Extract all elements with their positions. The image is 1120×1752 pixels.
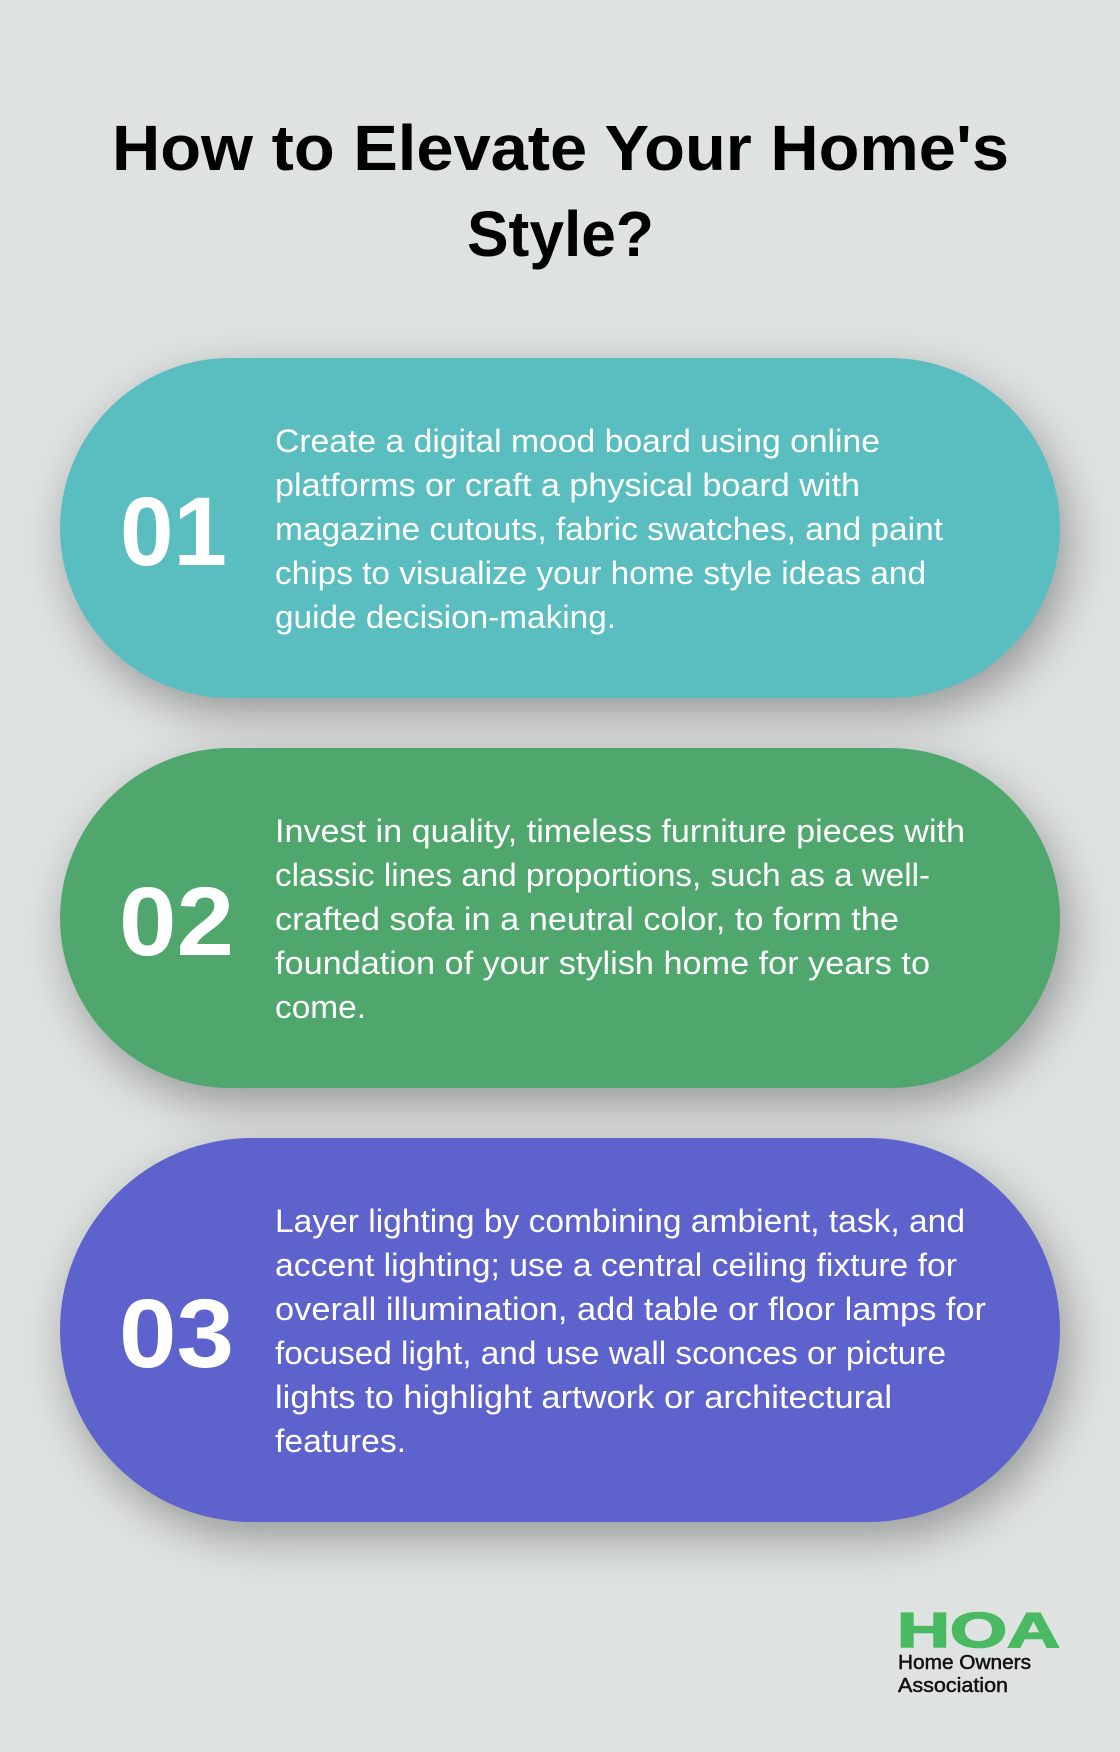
teal pill background xyxy=(60,358,1060,698)
step 03 description: features. xyxy=(275,1423,406,1459)
step 01 description xyxy=(275,423,943,635)
logo wordmark xyxy=(898,1652,1031,1697)
step 01 description: Create a digital mood board using online xyxy=(275,423,880,459)
number 03: 03 xyxy=(119,1279,234,1388)
step 02 description: crafted sofa in a neutral color, to form the xyxy=(275,901,899,937)
step 02 description: come. xyxy=(275,989,366,1025)
step 01 description: chips to visualize your home style ideas and xyxy=(275,555,926,591)
step 01 description: magazine cutouts, fabric swatches, and paint xyxy=(275,511,943,547)
logo: Home Owners Association xyxy=(897,1604,1060,1697)
step 03 description: focused light, and use wall sconces or picture xyxy=(275,1335,946,1371)
step 02 description: foundation of your stylish home for years to xyxy=(275,945,930,981)
logo wordmark: Home Owners xyxy=(898,1652,1031,1674)
panel: step 01 xyxy=(60,358,1060,698)
step 02 description: classic lines and proportions, such as a well- xyxy=(275,857,930,893)
number 02: 02 xyxy=(119,867,234,976)
step 03 description xyxy=(275,1203,986,1459)
number 01: 01 xyxy=(120,477,227,586)
step 03 description: lights to highlight artwork or architectural xyxy=(275,1379,892,1415)
title: How to Elevate Your Home's xyxy=(112,112,1009,184)
step 02 description xyxy=(275,813,965,1025)
step 03 description: overall illumination, add table or floor lamps for xyxy=(275,1291,986,1327)
indigo pill background xyxy=(60,1138,1060,1522)
step 02 description: Invest in quality, timeless furniture pieces with xyxy=(275,813,965,849)
step 03 description: accent lighting; use a central ceiling fixture for xyxy=(275,1247,957,1283)
logo mark HOA: HOA xyxy=(897,1604,1060,1658)
step 01 description: guide decision-making. xyxy=(275,599,616,635)
step 03 description: Layer lighting by combining ambient, task, and xyxy=(275,1203,965,1239)
green pill background xyxy=(60,748,1060,1088)
title: Style? xyxy=(467,198,654,270)
panel: step 02 xyxy=(60,748,1060,1088)
title xyxy=(112,112,1009,270)
step 01 description: platforms or craft a physical board with xyxy=(275,467,860,503)
logo wordmark: Association xyxy=(898,1675,1008,1697)
panel: step 03 xyxy=(60,1138,1060,1522)
